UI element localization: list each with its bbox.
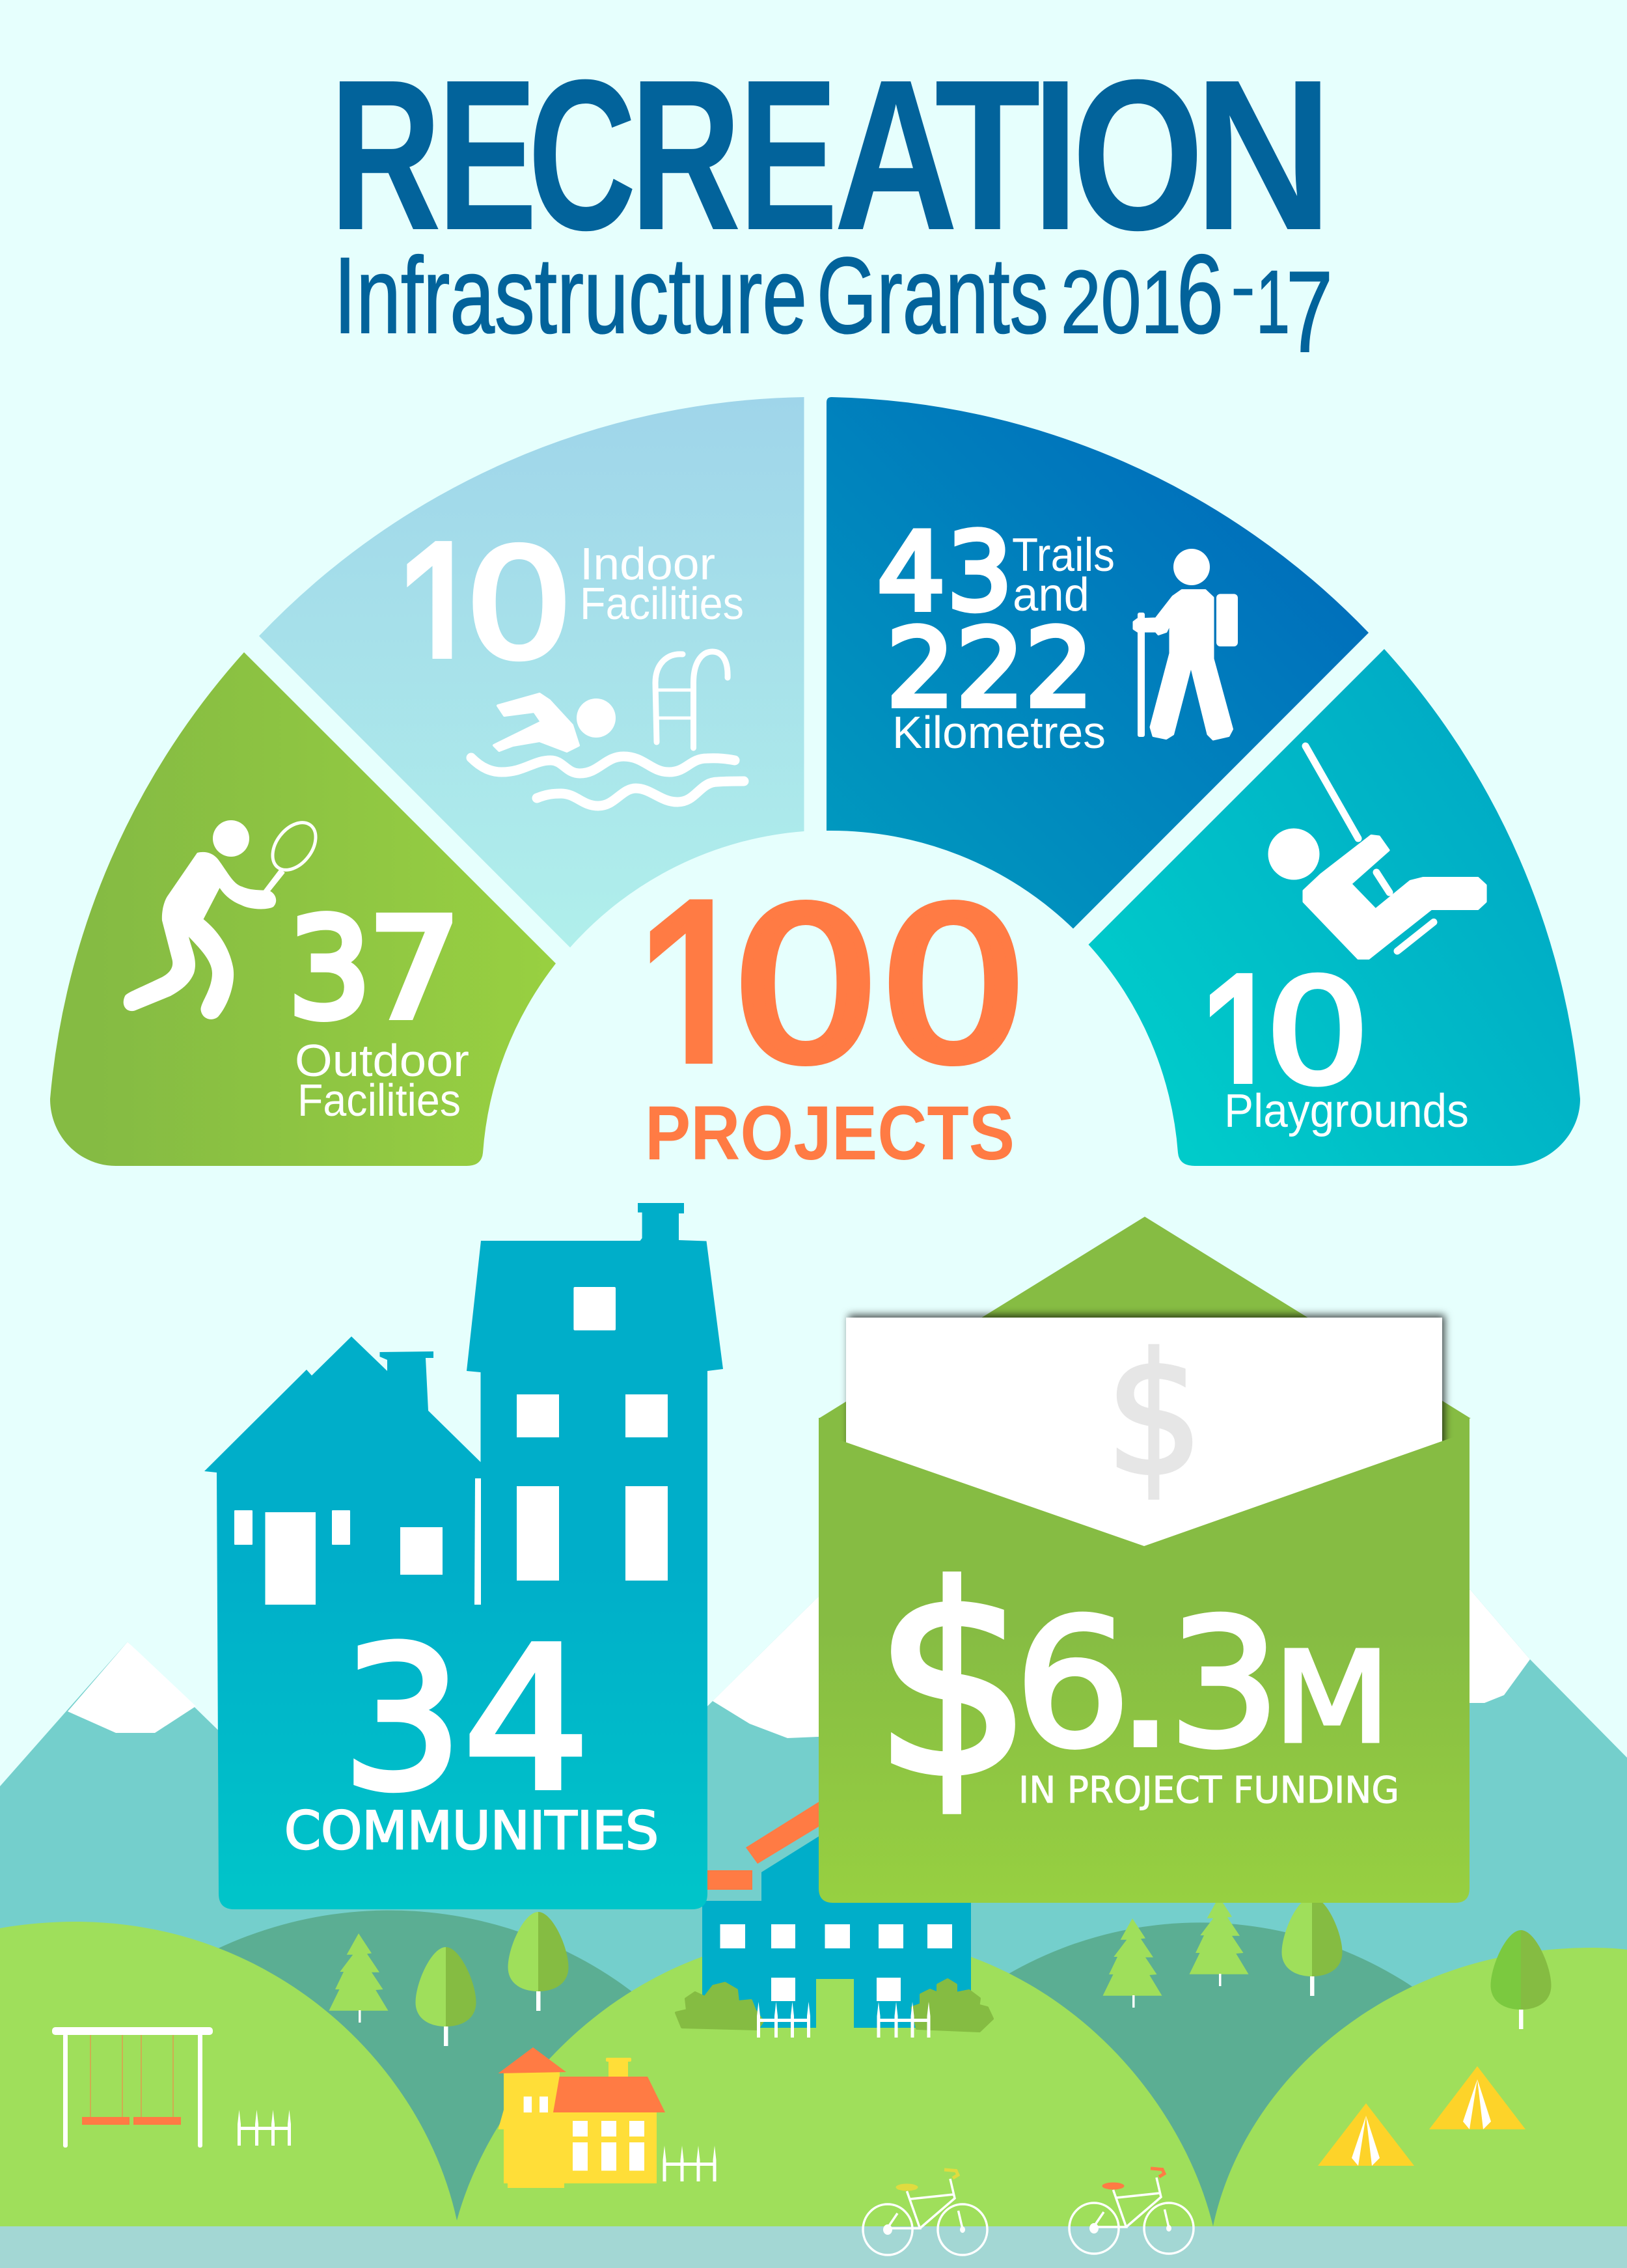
total projects number: 0 [879, 866, 1028, 1108]
playgrounds number: 1 [1197, 937, 1283, 1141]
kilometres label: Kilometres [892, 707, 1106, 758]
envelope back and flap [819, 1217, 1471, 1497]
playgrounds number [1210, 973, 1362, 1087]
funding amount: 6 [1015, 1581, 1131, 1786]
kilometres number: 2 [957, 607, 1024, 730]
icon: hiker [1134, 549, 1238, 740]
indoor number: 0 [465, 517, 574, 693]
subtitle: 6 [1177, 232, 1224, 357]
trails number [877, 510, 1013, 634]
mountains [0, 1530, 1627, 2148]
communities number: 4 [463, 1606, 590, 1833]
fence: building left [757, 2002, 810, 2038]
house windows [234, 1287, 668, 1605]
back tree: pine right 2 [1190, 1897, 1248, 1986]
title: A [834, 35, 958, 275]
subtitle [334, 232, 1333, 376]
back tree: oval B [508, 1912, 569, 2011]
subtitle: - [1231, 251, 1255, 324]
icon: child on swing [1268, 746, 1486, 958]
back tree: pine right 1 [1102, 1918, 1162, 2008]
tents [1318, 2066, 1525, 2166]
back tree: oval C [1282, 1897, 1342, 1996]
panel: funding envelope [819, 1217, 1471, 1903]
communities label: COMMUNITIES [284, 1801, 659, 1861]
title [329, 35, 1333, 275]
funding amount: 3 [1169, 1581, 1281, 1786]
outdoor label: Outdoor [295, 1035, 469, 1086]
total projects label: PROJECTS [645, 1090, 1015, 1176]
tree: right oval [1490, 1930, 1552, 2029]
subtitle: 201 [1061, 253, 1181, 352]
green hills [0, 1922, 1627, 2268]
total projects number [649, 900, 1018, 1066]
funding dollar sign: $ [873, 1532, 1033, 1834]
bicycle 1 [863, 2170, 987, 2255]
subtitle: Grants [817, 236, 1048, 356]
middle building [702, 1802, 971, 2028]
title: R [630, 35, 741, 275]
outdoor number: 3 [288, 889, 371, 1049]
total projects number: 0 [731, 866, 881, 1108]
outdoor number: 7 [368, 889, 461, 1049]
trails number: 3 [948, 510, 1013, 634]
title: C [528, 35, 636, 275]
outdoor label: Facilities [297, 1075, 461, 1126]
communities number: 3 [342, 1606, 463, 1833]
total projects number: 1 [631, 844, 759, 1146]
trails number: 4 [877, 510, 945, 634]
trails label: and [1013, 569, 1089, 621]
funding unit: M [1274, 1626, 1391, 1771]
yellow house [499, 2047, 665, 2188]
playgrounds label: Playgrounds [1224, 1085, 1469, 1137]
fence: by yellow house [663, 2146, 716, 2181]
indoor label: Indoor [580, 538, 715, 589]
icon: tennis player [124, 814, 325, 1019]
title: O [1072, 35, 1204, 275]
panel: playgrounds [1088, 649, 1580, 1166]
panel: outdoor facilities [50, 652, 556, 1166]
title: N [1194, 35, 1333, 275]
kilometres number [886, 607, 1093, 730]
funding amount: . [1117, 1581, 1173, 1786]
funding amount [1015, 1581, 1281, 1786]
letter dollar sign: $ [1106, 1318, 1203, 1513]
title: R [329, 35, 441, 275]
kilometres number: 2 [1026, 607, 1093, 730]
indoor label [580, 538, 744, 629]
panel: trails [827, 397, 1369, 928]
dark hills [0, 1911, 1582, 2268]
subtitle: 1 [1256, 253, 1290, 352]
title: E [739, 35, 838, 275]
funding label: IN PROJECT FUNDING [1019, 1769, 1399, 1812]
bicycle 2 [1069, 2168, 1194, 2254]
fence: by swing [238, 2110, 291, 2146]
communities number [342, 1606, 590, 1833]
icon: swimmer [471, 694, 744, 806]
outdoor label [295, 1035, 469, 1126]
icon: pool ladder [655, 652, 728, 748]
title: T [935, 35, 1041, 275]
letter card [846, 1318, 1442, 1552]
water band [0, 2226, 1627, 2268]
back tree: pine left [329, 1933, 388, 2023]
envelope front [819, 1431, 1470, 1903]
trails label [1012, 529, 1115, 621]
playground swing [52, 2027, 213, 2148]
bush left [676, 1983, 763, 2029]
bush right [912, 1980, 992, 2031]
back tree: oval A [415, 1947, 476, 2046]
fence: building right [877, 2002, 931, 2038]
outdoor number [288, 889, 461, 1049]
indoor label: Facilities [580, 578, 744, 629]
title: E [437, 35, 538, 275]
panel: communities house [204, 1203, 723, 1909]
subtitle: Infrastructure [334, 236, 807, 356]
subtitle: 7 [1286, 247, 1333, 376]
panel: indoor facilities [259, 397, 804, 948]
kilometres number: 2 [886, 607, 954, 730]
playgrounds number: 0 [1265, 949, 1370, 1117]
indoor number [407, 541, 566, 661]
trails label: Trails [1012, 529, 1115, 581]
indoor number: 1 [394, 502, 485, 718]
title: I [1032, 35, 1079, 275]
